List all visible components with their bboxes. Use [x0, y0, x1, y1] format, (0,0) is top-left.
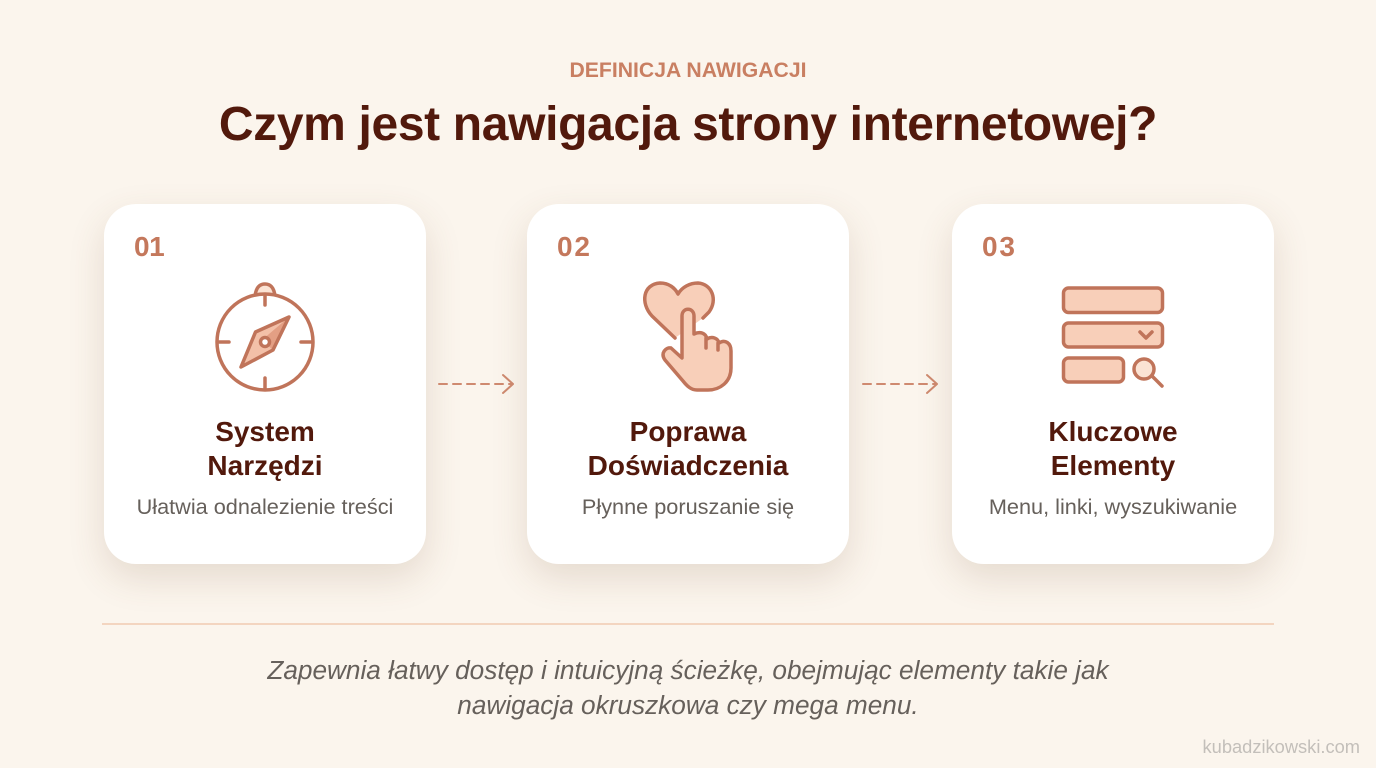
card heading: Kluczowe [1048, 416, 1178, 447]
card heading [588, 416, 788, 480]
card heading: Poprawa [630, 416, 746, 447]
icon: menu rows and search [1062, 286, 1164, 388]
panel: card 02 [527, 204, 849, 564]
watermark: kubadzikowski.com [1203, 736, 1360, 757]
summary text [266, 655, 1110, 720]
arrow: card 1 to card 2 [438, 374, 514, 394]
summary text: Zapewnia łatwy dostęp i intuicyjną ścieżkę, obejmując elementy takie jak [267, 655, 1109, 685]
card heading [207, 416, 323, 481]
divider [102, 623, 1274, 625]
summary text: nawigacja okruszkowa czy mega menu. [457, 690, 919, 720]
icon: compass [215, 282, 315, 392]
panel: card 01 [104, 204, 426, 564]
panel: card 03 [952, 204, 1274, 564]
arrow: card 2 to card 3 [862, 374, 938, 394]
step number 01: 01 [134, 231, 164, 262]
step number 03: 03 [982, 231, 1017, 262]
card heading [1048, 416, 1178, 481]
step number 02: 02 [557, 231, 592, 262]
card heading: Doświadczenia [588, 450, 788, 480]
eyebrow label: DEFINICJA NAWIGACJI [569, 59, 806, 82]
card heading: System [215, 416, 315, 447]
title: Czym jest nawigacja strony internetowej? [219, 98, 1157, 151]
card description: Ułatwia odnalezienie treści [137, 494, 393, 519]
card description: Płynne poruszanie się [582, 494, 794, 519]
card heading: Narzędzi [207, 450, 323, 480]
icon: heart and pointing hand [643, 281, 733, 392]
card heading: Elementy [1051, 450, 1175, 480]
card description: Menu, linki, wyszukiwanie [989, 494, 1237, 519]
